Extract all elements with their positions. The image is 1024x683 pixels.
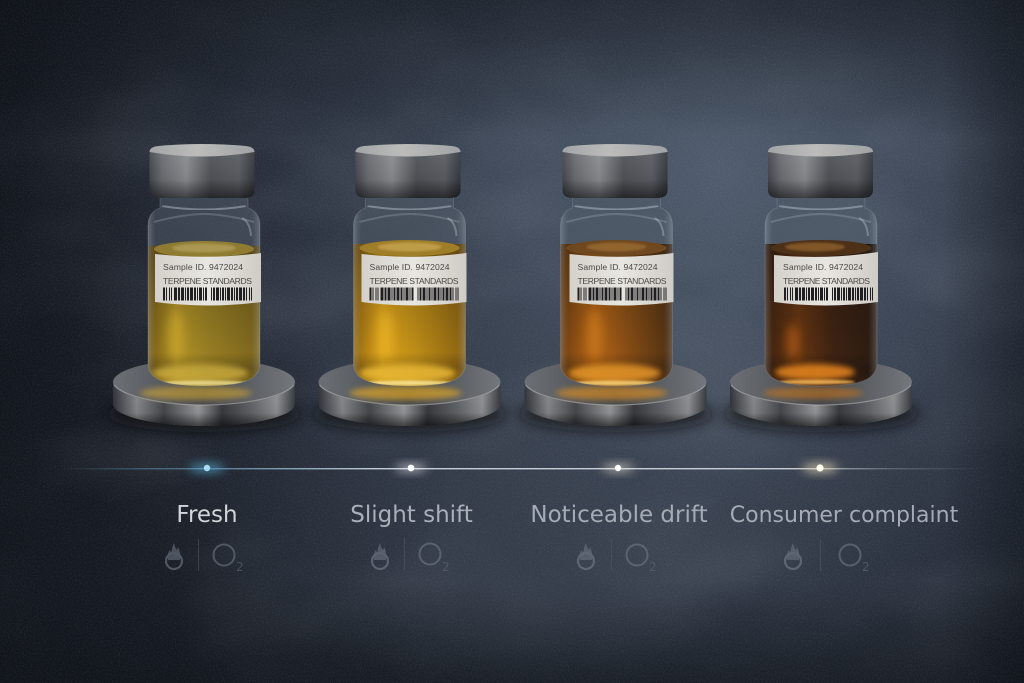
sample label 4: Sample ID. 9472024	[783, 262, 863, 272]
glass and liquid 3	[560, 195, 672, 388]
sample label 3	[570, 253, 674, 306]
cap 1	[150, 144, 254, 198]
heat and oxygen icons: Noticeable drift	[578, 539, 657, 574]
sample label 4: TERPENE STANDARDS	[783, 276, 870, 286]
heat and oxygen icons: Fresh	[166, 539, 244, 574]
pedestal 4	[723, 359, 919, 432]
sample label 2: TERPENE STANDARDS	[370, 276, 459, 286]
sample label 1: TERPENE STANDARDS	[163, 276, 252, 286]
timeline marker: consumer complaint	[802, 464, 838, 472]
sample label 3: TERPENE STANDARDS	[578, 276, 667, 286]
icon: flame	[372, 543, 388, 569]
icon: flame	[785, 543, 801, 569]
pedestal 2	[312, 359, 508, 432]
vial 4: consumer complaint	[723, 144, 919, 432]
timeline	[60, 464, 980, 472]
vial 3: noticeable drift	[518, 144, 714, 432]
vial 1: fresh	[106, 144, 302, 432]
vial 2: slight shift	[312, 144, 508, 432]
cap 4	[768, 144, 873, 198]
stage label: Consumer complaint: Consumer complaint	[730, 503, 959, 528]
heat and oxygen icons: Slight shift	[372, 538, 450, 574]
timeline marker: slight shift	[395, 464, 427, 472]
glass and liquid 4	[765, 195, 877, 388]
heat and oxygen icons: Consumer complaint	[785, 539, 870, 574]
sample label 2	[362, 253, 466, 306]
sample label 1: Sample ID. 9472024	[163, 262, 243, 272]
stage label: Fresh: Fresh	[176, 502, 238, 528]
icon: O2: 2	[442, 560, 450, 574]
cap 3	[562, 144, 668, 198]
glass and liquid 2	[354, 195, 466, 388]
glass and liquid 1	[148, 195, 260, 388]
icon: O2: 2	[649, 560, 657, 574]
pedestal 1	[106, 359, 302, 432]
pedestal 3	[518, 359, 714, 432]
stage label: Slight shift: Slight shift	[350, 502, 473, 528]
icon: flame	[166, 543, 182, 569]
sample label 4	[774, 252, 878, 306]
timeline marker: noticeable drift	[602, 464, 634, 472]
icon: O2: 2	[862, 560, 870, 574]
sample label 2: Sample ID. 9472024	[370, 262, 450, 272]
stage label: Noticeable drift: Noticeable drift	[530, 502, 708, 528]
sample label 1	[155, 253, 261, 306]
timeline marker: fresh	[189, 464, 225, 472]
sample label 3: Sample ID. 9472024	[578, 262, 658, 272]
cap 2	[356, 144, 460, 198]
icon: flame	[578, 543, 594, 569]
icon: O2: 2	[236, 560, 244, 574]
